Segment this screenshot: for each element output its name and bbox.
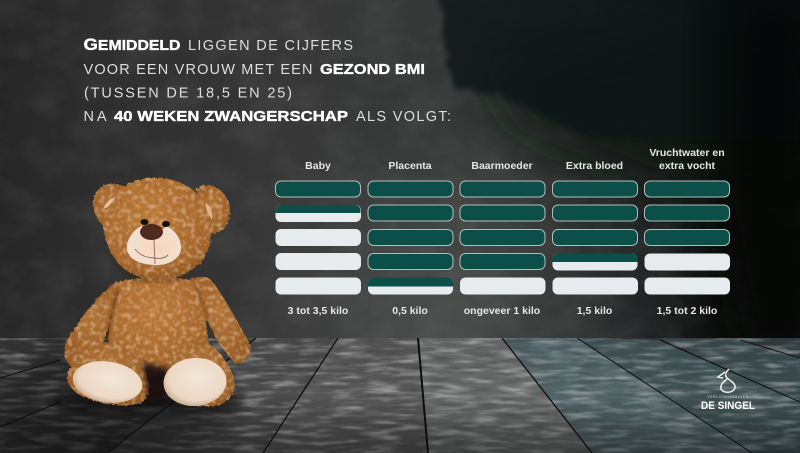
heading text: LIGGEN DE CIJFERS <box>188 38 353 54</box>
teddy bear <box>55 178 251 411</box>
bear shadow <box>55 393 245 411</box>
column: Baby <box>276 160 361 317</box>
column: Extra bloed <box>552 160 638 317</box>
heading text: 40 WEKEN ZWANGERSCHAP <box>114 109 348 125</box>
heading text: GEZOND BMI <box>320 62 425 78</box>
shadow between the legs <box>142 362 168 404</box>
column: Placenta: 0,5 kilo <box>392 305 428 317</box>
bear fur: body, limbs and head <box>65 178 251 407</box>
wooden floor <box>0 338 800 453</box>
inner ears <box>103 197 116 209</box>
heading text: VOOR EEN VROUW MET EEN <box>84 62 312 78</box>
heading text <box>84 35 451 125</box>
logo: De Singel: DE SINGEL <box>701 400 755 412</box>
column: Vruchtwater en extra vocht <box>644 147 730 317</box>
heading text: NA <box>84 109 107 125</box>
column: Placenta <box>368 160 453 317</box>
column: Extra bloed: Extra bloed <box>566 160 623 172</box>
column: Vruchtwater en extra vocht: extra vocht <box>659 160 716 172</box>
heading text: ALS VOLGT: <box>356 109 451 125</box>
mouth <box>135 240 168 264</box>
wall background <box>0 0 800 360</box>
fur shading <box>106 256 216 342</box>
column: Placenta: Placenta <box>388 160 432 172</box>
column: Baby: Baby <box>305 160 331 172</box>
icon: swan <box>718 369 735 392</box>
right foot <box>162 356 228 408</box>
column: Vruchtwater en extra vocht: Vruchtwater en <box>649 147 725 159</box>
heading text: GEMIDDELD <box>84 35 180 54</box>
column: Baarmoeder: ongeveer 1 kilo <box>464 305 540 317</box>
heading text: (TUSSEN DE 18,5 EN 25) <box>84 86 292 102</box>
column: Baarmoeder <box>460 160 546 317</box>
left foot <box>70 357 145 407</box>
column: Baarmoeder: Baarmoeder <box>471 160 533 172</box>
logo: De Singel <box>701 369 755 412</box>
bar chart <box>276 147 730 317</box>
column: Vruchtwater en extra vocht: 1,5 tot 2 kilo <box>657 305 717 317</box>
column: Baby: 3 tot 3,5 kilo <box>288 305 348 317</box>
muzzle <box>127 226 181 265</box>
eyes <box>140 219 148 225</box>
column: Extra bloed: 1,5 kilo <box>577 305 612 317</box>
nose <box>140 224 163 240</box>
logo: De Singel: VERLOSKUNDIGEN <box>707 395 749 399</box>
